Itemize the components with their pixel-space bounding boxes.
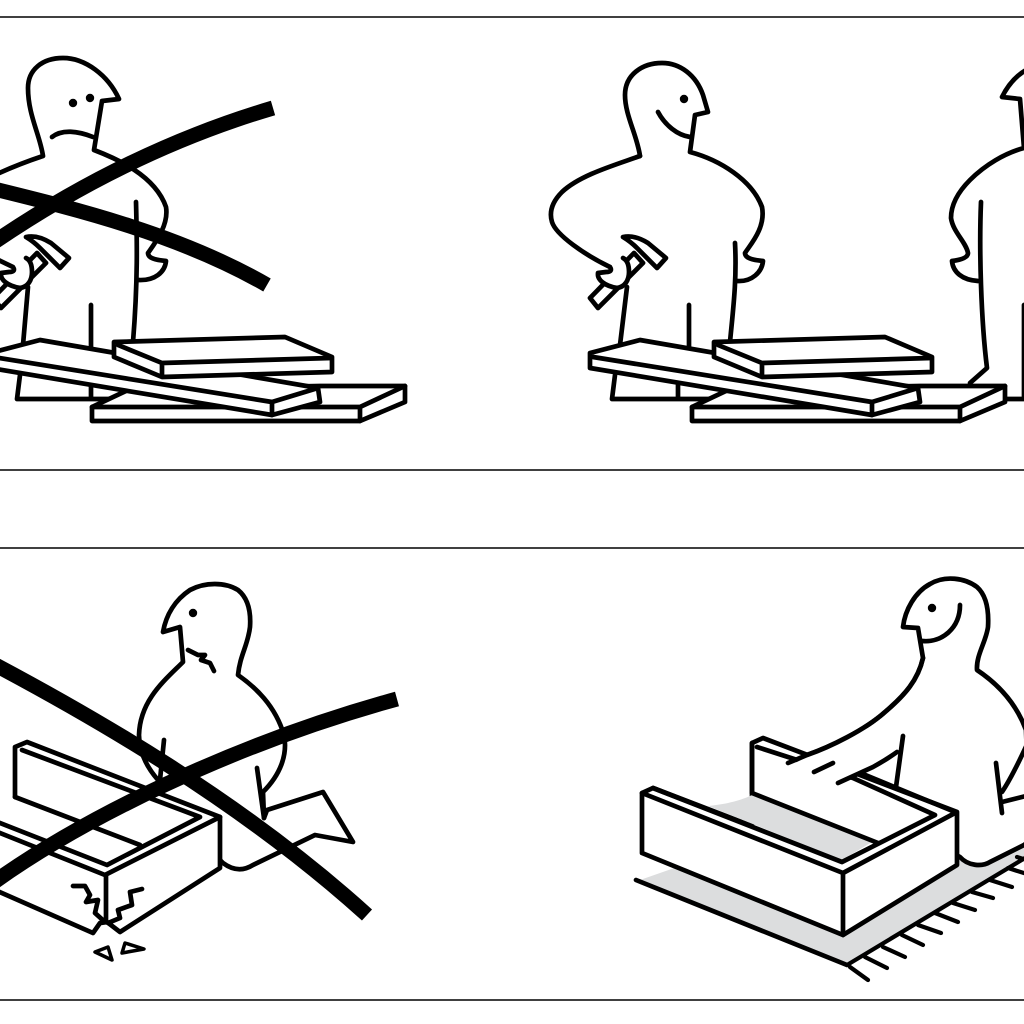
cross-out mark xyxy=(0,662,397,915)
sad person xyxy=(0,58,166,399)
hammer in hand xyxy=(0,236,69,308)
assembled box xyxy=(642,738,957,935)
helper person at right edge xyxy=(951,68,1024,399)
broken fragments xyxy=(95,943,144,960)
stack of boards xyxy=(0,337,405,421)
panel: happy person with helper and boards xyxy=(551,63,1024,421)
happy person xyxy=(551,63,763,399)
stack of boards xyxy=(590,337,1005,421)
hammer in hand xyxy=(590,236,666,308)
cross-out mark xyxy=(0,108,273,285)
kneeling person xyxy=(139,584,353,869)
panel: sad person alone with boards, crossed out xyxy=(0,58,405,421)
damaged box xyxy=(0,742,220,933)
smiling person xyxy=(807,579,1024,865)
rug xyxy=(636,842,1024,980)
arm reaching over box xyxy=(788,658,923,787)
panel: kneeling person on bare floor with damaged box, crossed out xyxy=(0,584,397,960)
panel: smiling person on rug with intact box xyxy=(636,579,1024,980)
